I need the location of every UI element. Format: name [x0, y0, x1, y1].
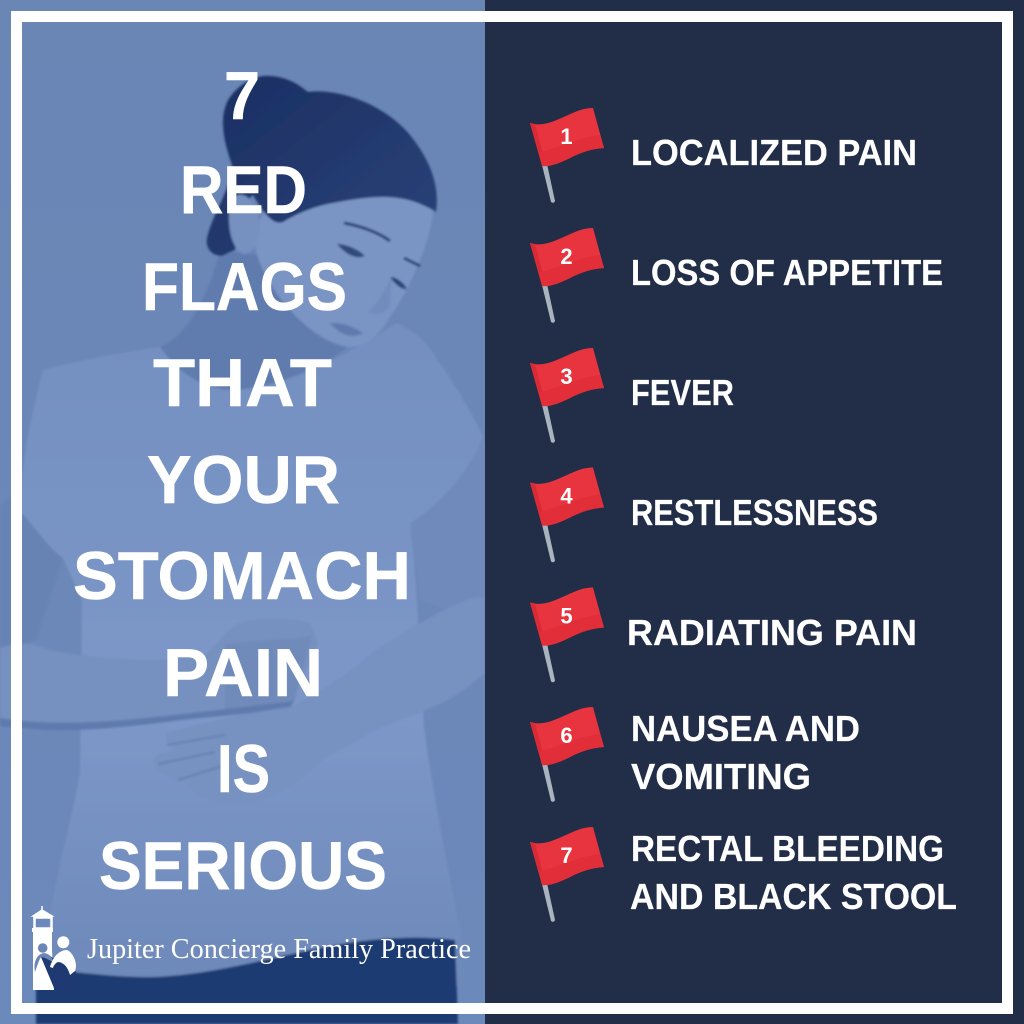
ear — [229, 195, 260, 254]
label 4: RESTLESSNESS — [631, 492, 878, 533]
flag item 2 — [530, 228, 604, 323]
label 1: LOCALIZED PAIN — [631, 132, 917, 173]
flag item 1 — [530, 108, 604, 203]
nose shadow — [368, 275, 392, 314]
flag item 4 — [530, 468, 604, 562]
panel: photo background — [0, 0, 485, 1024]
logo text: Jupiter Concierge Family Practice — [87, 933, 471, 965]
label 7 — [630, 828, 957, 917]
flag item 2: 2 — [560, 244, 573, 269]
left upper arm — [0, 480, 66, 650]
label 6: VOMITING — [631, 756, 811, 797]
hair — [207, 76, 437, 256]
jeans — [36, 938, 458, 1024]
left forearm and hand — [0, 644, 224, 722]
photo: woman holding her stomach — [0, 76, 485, 1024]
neck — [160, 250, 350, 390]
flag item 6 — [530, 707, 604, 802]
heading: THAT — [153, 345, 332, 421]
heading: RED — [180, 152, 307, 228]
flag item 7: 7 — [560, 843, 573, 868]
label 7: AND BLACK STOOL — [630, 876, 957, 917]
flag item 5 — [530, 588, 604, 682]
right upper arm — [410, 440, 485, 610]
label 3: FEVER — [631, 372, 734, 413]
label 2: LOSS OF APPETITE — [631, 252, 943, 293]
heading: STOMACH — [73, 538, 411, 614]
logo: Jupiter Concierge Family Practice — [32, 906, 471, 990]
panel: dark list background — [485, 0, 1024, 1024]
forearm shadow — [0, 701, 294, 730]
hand shading — [225, 636, 312, 712]
flag item 3 — [530, 348, 604, 443]
lips — [330, 323, 363, 336]
flag item 3: 3 — [560, 364, 573, 389]
flag item 7 — [530, 827, 604, 922]
heading: IS — [217, 731, 270, 807]
label 5: RADIATING PAIN — [627, 612, 917, 653]
flag item 4: 4 — [560, 484, 573, 508]
flag item 1: 1 — [560, 124, 573, 149]
flag item 6: 6 — [560, 723, 573, 748]
face — [254, 186, 433, 347]
heading: YOUR — [147, 442, 340, 518]
label 6: NAUSEA AND — [631, 708, 860, 749]
eyes — [337, 244, 365, 257]
fingers — [158, 735, 225, 780]
t-shirt — [20, 323, 483, 985]
heading: FLAGS — [142, 249, 347, 325]
flag item 5: 5 — [560, 604, 573, 628]
eyebrow — [344, 223, 390, 241]
heading — [73, 58, 411, 904]
label 7: RECTAL BLEEDING — [631, 828, 944, 869]
right forearm and hand — [419, 600, 484, 709]
heading: 7 — [224, 58, 260, 134]
heading: SERIOUS — [99, 828, 387, 904]
heading: PAIN — [163, 635, 323, 711]
label 6 — [631, 708, 860, 797]
icon: lighthouse and family — [32, 906, 76, 990]
